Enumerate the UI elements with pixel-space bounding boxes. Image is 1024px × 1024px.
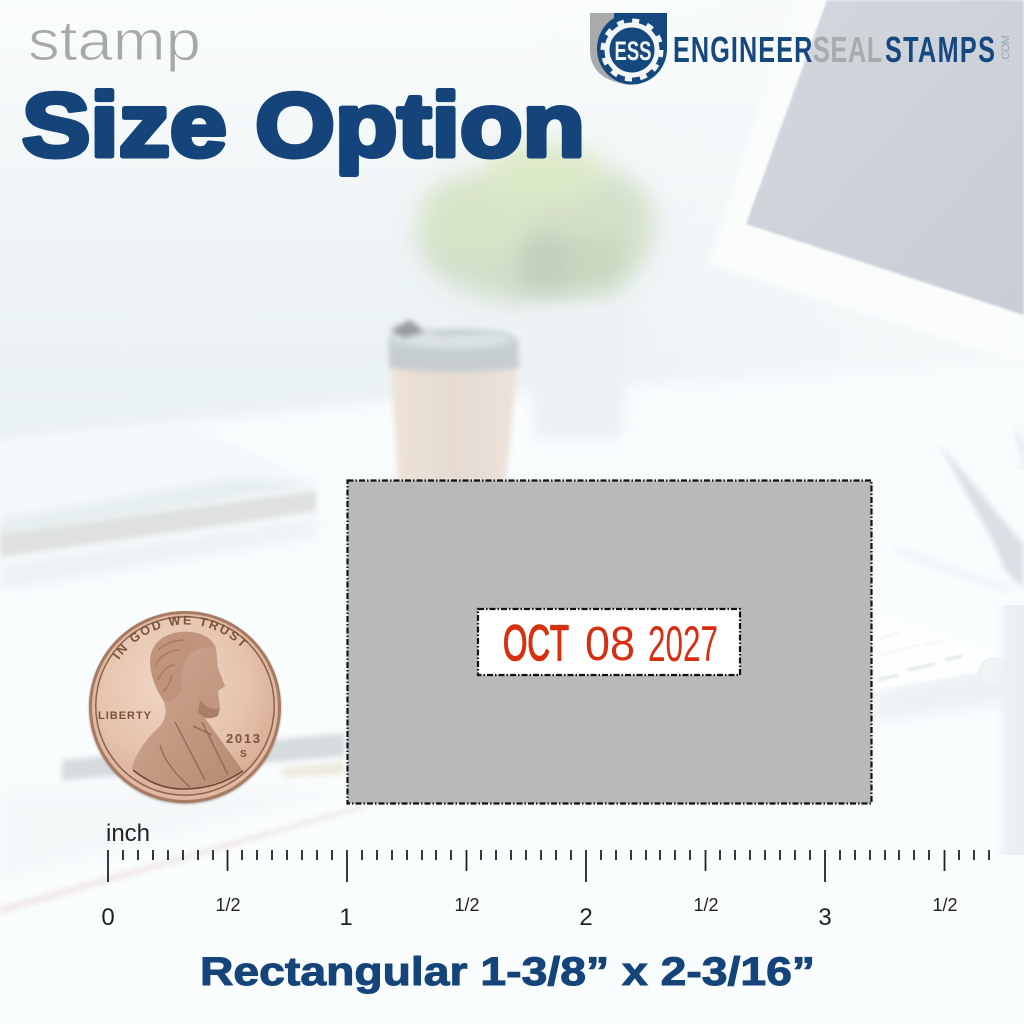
date impression: OCT <box>503 615 569 671</box>
desk reflection line <box>0 805 372 914</box>
monitor <box>708 0 1024 364</box>
pens in holder <box>895 425 1024 855</box>
size caption: Rectangular 1-3/8” x 2-3/16” <box>200 950 815 994</box>
desk surface <box>0 364 1024 1024</box>
stamp text area <box>478 609 740 675</box>
scale numbers: 3 <box>818 904 832 931</box>
unit label: inch <box>106 820 150 847</box>
penny coin: LIBERTY <box>98 710 152 722</box>
logo .com: .COM <box>1000 35 1012 62</box>
coffee cup <box>389 320 519 484</box>
half-inch labels: 1/2 <box>454 895 480 915</box>
logo wordmark <box>673 30 995 70</box>
half-inch labels: 1/2 <box>932 895 958 915</box>
date impression: 08 <box>585 618 635 671</box>
logo: Engineer Seal Stamps <box>590 13 1012 85</box>
logo wordmark: STAMPS <box>885 30 995 70</box>
date impression <box>503 615 718 672</box>
stamp impression area <box>348 480 872 804</box>
date impression: 2027 <box>648 616 718 672</box>
scale numbers: 0 <box>101 904 115 931</box>
scale numbers: 1 <box>339 904 353 931</box>
title: Size Option: Size Option <box>22 76 585 176</box>
logo wordmark: ENGINEER <box>673 30 812 70</box>
logo badge <box>590 13 667 85</box>
penny coin: S <box>240 749 247 760</box>
plant <box>417 142 655 303</box>
penny coin <box>88 610 282 806</box>
scale numbers <box>101 904 832 931</box>
scale numbers: 2 <box>579 904 593 931</box>
Lincoln portrait <box>132 632 243 789</box>
half-inch labels <box>215 895 958 915</box>
penny coin: 2013 <box>226 731 260 746</box>
plant pot <box>525 308 630 440</box>
pen on desk <box>62 733 345 781</box>
half-inch labels: 1/2 <box>693 895 719 915</box>
notebook <box>0 425 318 590</box>
ruler <box>101 820 989 931</box>
keyboard <box>872 612 1024 722</box>
title: stamp: stamp <box>28 9 201 73</box>
half-inch labels: 1/2 <box>215 895 241 915</box>
penny coin: IN GOD WE TRUST <box>112 616 248 660</box>
coin inscriptions <box>119 625 255 665</box>
ruler ticks <box>108 850 989 882</box>
logo wordmark: SEAL <box>813 30 882 70</box>
logo badge: ESS <box>614 36 652 66</box>
